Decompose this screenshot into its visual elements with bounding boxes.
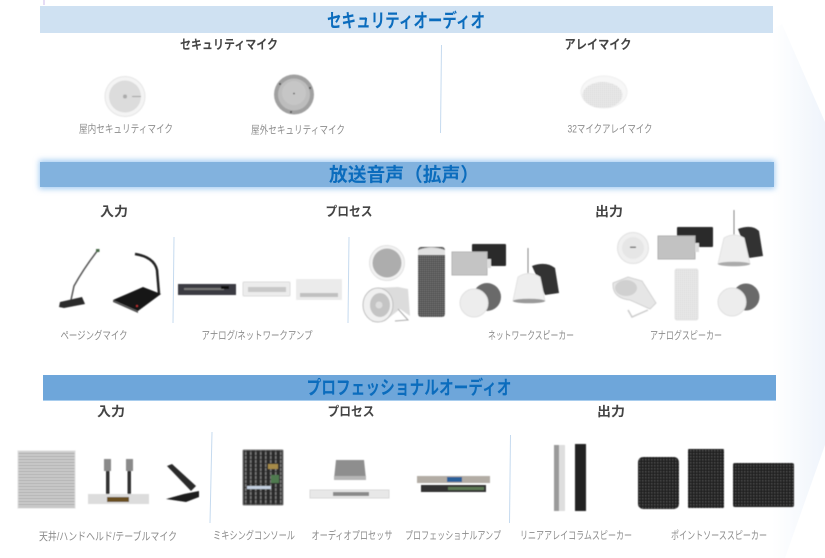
banner: security audio: セキュリティオーディオ <box>327 9 485 32</box>
label: professional amp: プロフェッショナルアンプ <box>405 529 501 542</box>
icon: ceiling, handheld and table mics <box>18 451 199 508</box>
label: audio processor: オーディオプロセッサ <box>312 528 392 542</box>
icon: analog speakers <box>613 210 763 320</box>
icon: amplifiers <box>178 279 342 300</box>
label: network speaker: ネットワークスピーカー <box>488 329 574 342</box>
label: indoor security mic: 屋内セキュリティマイク <box>79 122 173 136</box>
banner: broadcast audio: 放送音声（拡声） <box>329 164 479 186</box>
divider: security section <box>440 45 442 133</box>
banner: broadcast audio <box>39 160 775 189</box>
dividers: professional section <box>210 432 510 523</box>
heading: process: プロセス <box>326 204 372 219</box>
label: ceiling, handheld and table mics: 天井/ハンドヘルド/テーブルマイク <box>39 529 177 543</box>
icon: professional amp <box>417 476 490 492</box>
heading: input: 入力 <box>97 404 125 419</box>
icon: indoor security mic <box>105 76 145 116</box>
icon: mixing console <box>243 450 283 505</box>
background shape <box>760 24 825 558</box>
label: array mic: 32マイクアレイマイク <box>568 122 652 136</box>
heading: output: 出力 <box>597 404 625 419</box>
heading: security mic: セキュリティマイク <box>180 37 278 52</box>
banner: professional audio <box>43 375 776 401</box>
heading: array mic: アレイマイク <box>564 37 632 52</box>
icon: audio processor <box>310 460 389 498</box>
label: paging mic: ページングマイク <box>60 328 128 342</box>
heading: process: プロセス <box>328 404 374 419</box>
label: amplifier: アナログ/ネットワークアンプ <box>202 328 312 342</box>
banner: security audio <box>40 6 773 33</box>
icon: array mic <box>581 76 627 108</box>
heading: output: 出力 <box>595 204 623 219</box>
label: mixing console: ミキシングコンソール <box>213 528 295 542</box>
heading: input: 入力 <box>100 204 128 219</box>
icon: linear array column speakers <box>554 444 586 511</box>
dividers: broadcast section <box>173 237 349 323</box>
label: point source speaker: ポイントソーススピーカー <box>671 529 767 542</box>
label: outdoor security mic: 屋外セキュリティマイク <box>251 124 345 136</box>
label: analog speaker: アナログスピーカー <box>650 328 722 342</box>
label: linear array column speaker: リニアアレイコラムスピーカー <box>520 529 632 542</box>
icon: point source speakers <box>638 449 794 509</box>
icon: outdoor security mic <box>274 74 314 114</box>
icon: paging mics <box>59 249 161 313</box>
banner: professional audio: プロフェッショナルオーディオ <box>306 376 512 399</box>
icon: network speakers <box>363 244 559 322</box>
